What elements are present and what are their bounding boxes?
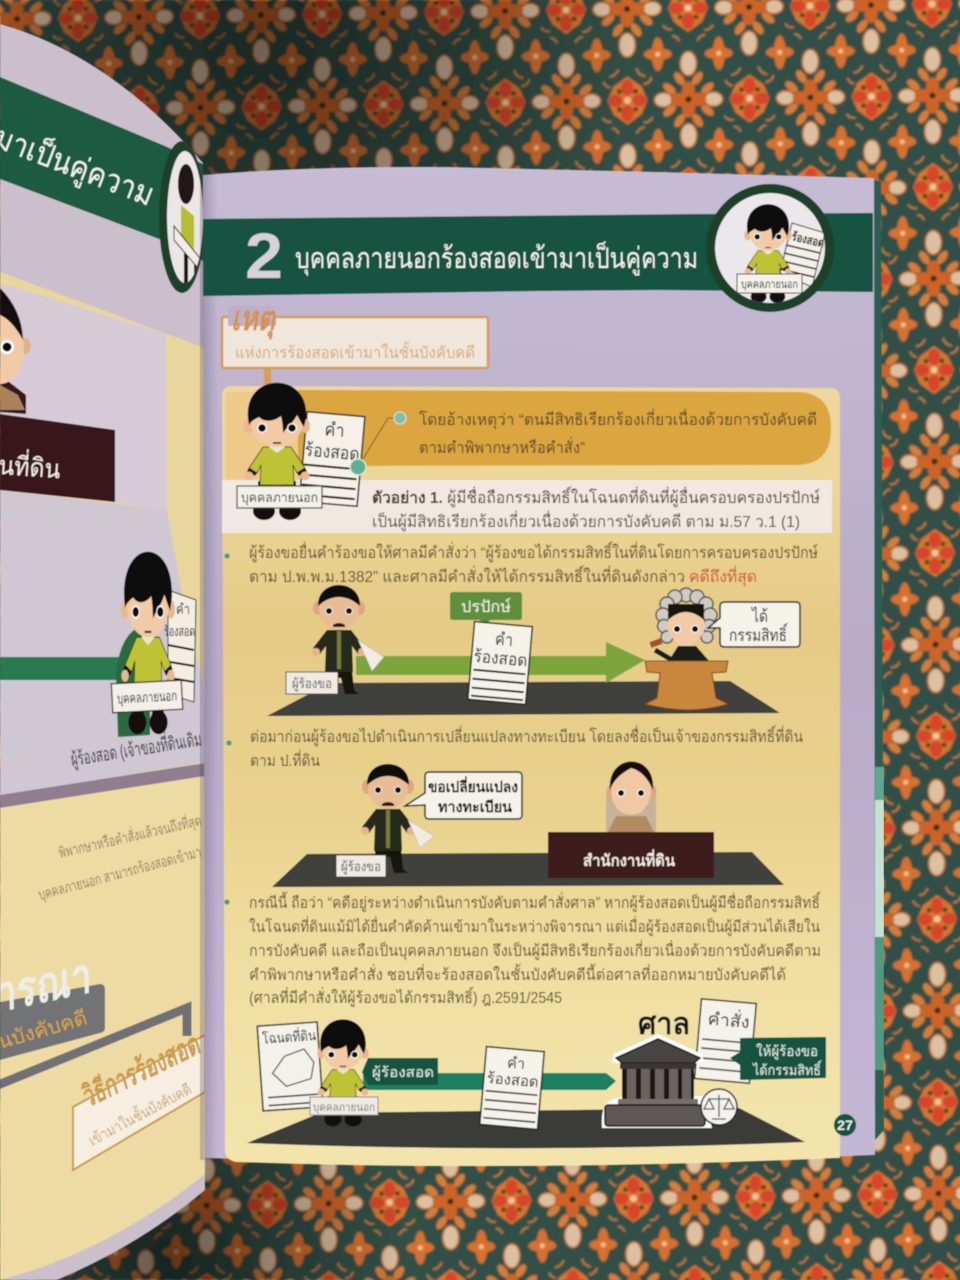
speech bubble: ownership bbox=[708, 602, 800, 647]
document: petition bbox=[480, 1047, 544, 1129]
left page green bar bbox=[0, 657, 125, 680]
bullet text 1: ผู้ร้องขอยื่นคำร้องขอให้ศาลมีคำสั่งว่า “ผู้ร้องขอได้กรรมสิทธิ์ในที่ดินโดยการครอบครองปรปักษ์ bbox=[249, 541, 818, 563]
label: intervenor: ผู้ร้องสอด bbox=[372, 1064, 434, 1081]
left page method heading box: เข้ามาในชั้นบังคับคดี bbox=[84, 1078, 195, 1150]
document: land title deed: โฉนดที่ดิน bbox=[261, 1026, 317, 1047]
bullet text 3: (ศาลที่มีคำสั่งให้ผู้ร้องขอได้กรรมสิทธิ์) ฎ.2591/2545 bbox=[249, 986, 562, 1008]
tag: order outcome: ให้ผู้ร้องขอ bbox=[756, 1043, 818, 1060]
left page body text: พิพากษาหรือคำสั่งแล้วจนถึงที่สุด bbox=[56, 810, 203, 863]
platform 2 bbox=[272, 852, 784, 887]
left page boy holding petition: ร้องสอด bbox=[164, 623, 195, 639]
section number 2: 2 bbox=[245, 220, 283, 292]
speech bubble: request change: ทางทะเบียน bbox=[438, 799, 513, 816]
land office desk sign: สำนักงานที่ดิน bbox=[583, 849, 675, 870]
character: third party boy with petition: คำ bbox=[324, 419, 345, 441]
bullet text 3: การบังคับคดี และถือเป็นบุคคลภายนอก จึงเป็นผู้มีสิทธิเรียกร้องเกี่ยวเนื่องด้วยการบังคับคดีตาม bbox=[249, 940, 821, 961]
bullet text 2: ต่อมาก่อนผู้ร้องขอไปดำเนินการเปลี่ยนแปลงทางทะเบียน โดยลงชื่อเป็นเจ้าของกรรมสิทธิ์ที่ดิน bbox=[250, 725, 803, 747]
left page yellow panel bbox=[0, 272, 205, 806]
character: petitioner with paper: ผู้ร้องขอ bbox=[292, 676, 332, 692]
document: petition bbox=[468, 622, 532, 704]
bullet text 2: ตาม ป.ที่ดิน bbox=[250, 749, 320, 770]
bullet text 3: กรณีนี้ ถือว่า “คดีอยู่ระหว่างดำเนินการบังคับตามคำสั่งศาล” หากผู้ร้องสอดเป็นผู้มีชื่อถือกรรมสิทธิ์ bbox=[249, 891, 822, 913]
left page header band bbox=[0, 77, 205, 262]
left page grey heading box bbox=[0, 965, 106, 1060]
bullet text 3: คำพิพากษาหรือคำสั่ง ชอบที่จะร้องสอดในชั้นบังคับคดีนี้ต่อศาลที่ออกหมายบังคับคดีได้ bbox=[249, 963, 786, 984]
character: third party boy with petition bbox=[237, 383, 365, 520]
arrow: green flow to judge bbox=[356, 642, 645, 683]
callout connector dots bbox=[350, 412, 406, 475]
document: court order: คำสั่ง bbox=[707, 1006, 751, 1032]
character: petitioner at registry bbox=[336, 764, 434, 877]
left page lower yellow panel bbox=[0, 776, 205, 1280]
tag: order outcome bbox=[730, 1037, 826, 1080]
example white strip: เป็นผู้มีสิทธิเรียกร้องเกี่ยวเนื่องด้วยการบังคับคดี ตาม ม.57 ว.1 (1) bbox=[372, 510, 800, 532]
document: petition: ร้องสอด bbox=[473, 647, 528, 670]
heading: court: ศาล bbox=[638, 1008, 690, 1041]
bullet text 3 bbox=[224, 891, 822, 1008]
left page brown office sign bbox=[0, 414, 115, 502]
label: intervenor bbox=[362, 1058, 438, 1085]
character: third party boy with petition: บุคคลภายนอก bbox=[241, 490, 318, 506]
left page officer character bbox=[0, 288, 31, 414]
page title: บุคคลภายนอกร้องสอดเข้ามาเป็นคู่ความ bbox=[295, 240, 698, 276]
character: third party boy: บุคคลภายนอก bbox=[313, 1102, 375, 1114]
tinted area behind boy bbox=[226, 392, 300, 480]
panel: left page of open book bbox=[0, 0, 210, 1280]
character: judge with wig at podium bbox=[645, 588, 728, 710]
left page body text bbox=[37, 810, 204, 905]
page number bbox=[834, 1114, 856, 1136]
character: petitioner at registry: ผู้ร้องขอ bbox=[341, 859, 381, 875]
tag: order outcome: ได้กรรมสิทธิ์ bbox=[752, 1060, 823, 1078]
orange reason pill bbox=[298, 390, 831, 466]
page number: 27 bbox=[837, 1117, 853, 1133]
arrow: teal flow to court bbox=[363, 1073, 616, 1090]
connector from heading to panel bbox=[264, 366, 271, 392]
left page caption: ผู้ร้องสอด (เจ้าของที่ดินเดิม bbox=[69, 726, 203, 771]
left page boy holding petition bbox=[111, 552, 196, 737]
document: petition: คำ bbox=[494, 630, 514, 650]
heading: เหตุ: แห่งการร้องสอดเข้ามาในชั้นบังคับคดี bbox=[235, 341, 475, 362]
left page body text: บุคคลภายนอก สามารถร้องสอดเข้ามา bbox=[37, 844, 204, 905]
document: petition: ร้องสอด bbox=[486, 1070, 539, 1091]
icon: scales of justice bbox=[701, 1089, 737, 1125]
left page grey connector bbox=[0, 1008, 187, 1085]
icon: header badge with boy and petition bbox=[706, 184, 834, 312]
orange reason pill: โดยอ้างเหตุว่า “ตนมีสิทธิเรียกร้องเกี่ยวเนื่องด้วยการบังคับคดี bbox=[419, 408, 817, 430]
left page purple divider bbox=[0, 763, 205, 808]
document: court order bbox=[695, 999, 756, 1083]
platform 3 bbox=[247, 1108, 805, 1148]
example white strip: ตัวอย่าง 1. ผู้มีชื่อถือกรรมสิทธิ์ในโฉนดที่ดินที่ผู้อื่นครอบครองปรปักษ์ bbox=[372, 486, 820, 508]
bullet text 3: ในโฉนดที่ดินแม้มิได้ยื่นคำคัดค้านเข้ามาในระหว่างพิจารณา แต่เมื่อผู้ร้องสอดเป็นผู้มีส่วนได้เสียใน bbox=[249, 916, 820, 937]
header band bbox=[203, 213, 873, 296]
land office desk sign bbox=[548, 832, 714, 878]
left page boy holding petition: คำ bbox=[176, 601, 190, 617]
left page method heading box bbox=[73, 1028, 206, 1170]
panel: yellow content panel bbox=[222, 386, 840, 1166]
document: land title deed bbox=[257, 1022, 323, 1111]
orange reason pill: ตามคำพิพากษาหรือคำสั่ง” bbox=[419, 436, 585, 457]
speech bubble: ownership: กรรมสิทธิ์ bbox=[729, 623, 789, 645]
bullet text 1: ตาม ป.พ.พ.ม.1382” และศาลมีคำสั่งให้ได้กรรมสิทธิ์ในที่ดินดังกล่าว bbox=[249, 565, 685, 586]
speech bubble: ownership: ได้ bbox=[750, 606, 768, 626]
platform 1 bbox=[267, 681, 780, 716]
left page circular character badge bbox=[159, 141, 205, 293]
character: petitioner with paper bbox=[286, 585, 384, 694]
icon: header badge with boy and petition: ร้องสอด bbox=[790, 229, 826, 250]
tag: adverse possession: ปรปักษ์ bbox=[461, 597, 511, 616]
icon: courthouse bbox=[602, 1034, 712, 1128]
character: third party boy with petition: ร้องสอด bbox=[304, 440, 360, 464]
bullet text 1 bbox=[224, 541, 818, 587]
speech bubble: request change bbox=[405, 772, 522, 819]
icon: header badge with boy and petition: บุคคลภายนอก bbox=[741, 279, 798, 291]
document: petition: คำ bbox=[506, 1055, 526, 1073]
panel: right book page bbox=[200, 167, 884, 1164]
left page method heading box: วิธีการร้องสอด bbox=[76, 1028, 206, 1114]
character: land officer bbox=[606, 762, 656, 832]
left page boy holding petition: บุคคลภายนอก bbox=[117, 687, 177, 708]
example white strip bbox=[222, 480, 832, 533]
bullet text 1: คดีถึงที่สุด bbox=[689, 565, 757, 587]
tag: adverse possession bbox=[450, 592, 522, 627]
heading: เหตุ bbox=[222, 300, 488, 368]
left page pale box bbox=[0, 285, 167, 510]
character: third party boy bbox=[310, 1019, 378, 1126]
left page grey panel bbox=[0, 490, 205, 796]
heading: เหตุ: เหตุ bbox=[231, 300, 276, 340]
speech bubble: request change: ขอเปลี่ยนแปลง bbox=[428, 776, 518, 796]
bullet text 2 bbox=[226, 725, 803, 770]
